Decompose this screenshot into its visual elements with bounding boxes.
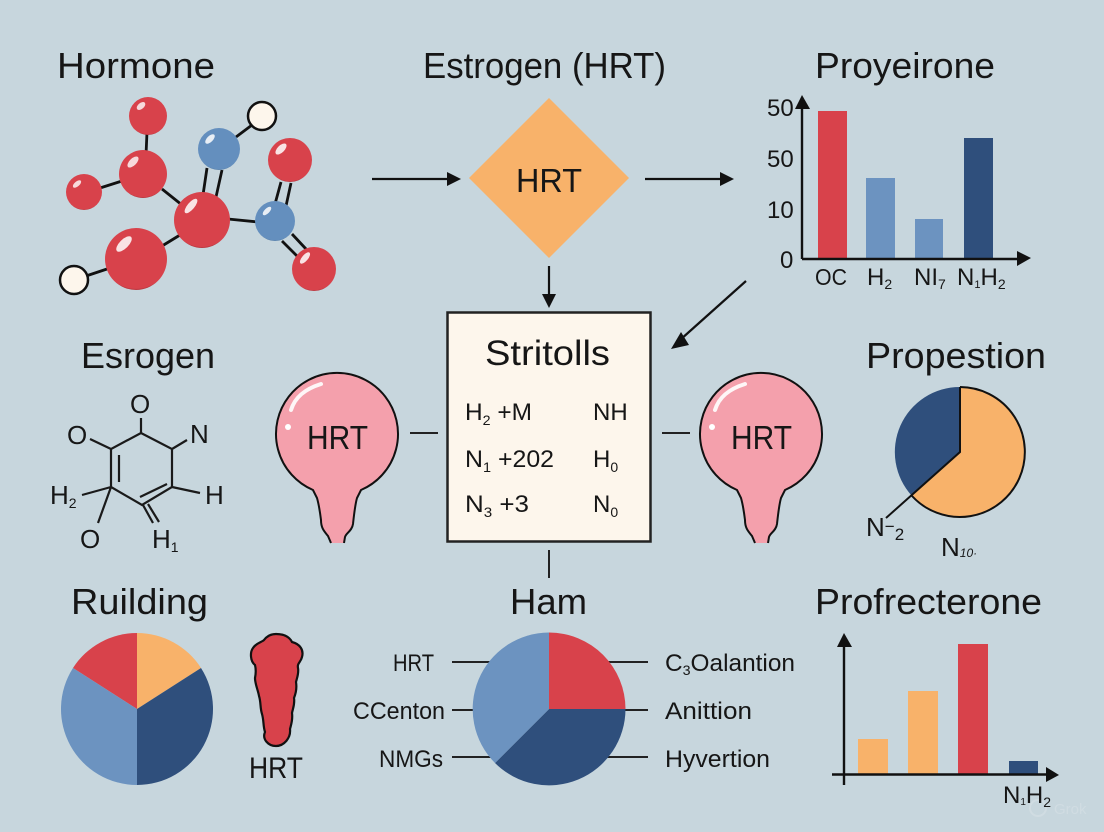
x axis labels: N [957, 264, 974, 291]
connector: left bulb to box [410, 432, 438, 434]
structure: skeletal formula [50, 389, 224, 555]
y axis labels: 0 [780, 247, 793, 274]
x axis labels: 7 [938, 276, 946, 292]
panel: Stritolls box: H [593, 446, 610, 473]
connector: below box [548, 550, 550, 578]
panel: Stritolls box: +3 [492, 491, 529, 518]
bars [858, 644, 1038, 774]
heading: Proyeirone: Proyeirone [815, 45, 995, 86]
structure: skeletal formula: O [80, 524, 100, 554]
panel: Stritolls box: NH [593, 399, 628, 426]
x axis label: 1 [1020, 797, 1026, 808]
icon: red organ with HRT label [249, 634, 303, 785]
panel: Stritolls box: 1 [483, 459, 491, 475]
heading: Profrecterone: Profrecterone [815, 581, 1042, 622]
callouts: Ham right labels: 3 [683, 662, 691, 678]
panel: Stritolls box: 3 [484, 504, 492, 520]
heading: Propestion: Propestion [866, 335, 1046, 376]
icon: red organ with HRT label: HRT [249, 752, 303, 785]
pie chart: Propestion: 2 [895, 525, 904, 544]
heading: Ruilding: Ruilding [71, 581, 208, 622]
axes [795, 95, 1031, 266]
bar chart: Proyeirone [767, 95, 1031, 292]
heading: Esrogen: Esrogen [81, 335, 215, 376]
structure: skeletal formula: H [152, 524, 171, 554]
x axis labels: 2 [884, 276, 892, 292]
panel: Stritolls box: N [593, 491, 610, 518]
panel: Stritolls box [448, 312, 650, 542]
x axis labels [815, 264, 1006, 292]
x axis label: N [1003, 782, 1020, 809]
x axis labels: OC [815, 264, 847, 290]
structure: skeletal formula: O [67, 420, 87, 450]
callouts: Ham right labels: Oalantion [691, 650, 795, 677]
icon: left HRT bulb [276, 373, 398, 543]
icon: ball and stick molecule [60, 97, 336, 294]
diamond: HRT [469, 98, 629, 258]
heading: Ham: Ham [510, 581, 587, 622]
y axis labels [767, 95, 794, 274]
arrow: diamond to box [542, 266, 556, 308]
callouts: Ham left labels: CCenton [353, 698, 445, 725]
panel: Stritolls box: 0 [610, 459, 618, 475]
arrow: chart to box [671, 281, 746, 349]
arrow: molecule to diamond [372, 172, 461, 186]
heading: Estrogen (HRT): Estrogen (HRT) [423, 45, 666, 86]
y axis labels: 50 [767, 95, 794, 122]
x axis labels: H [980, 264, 998, 291]
bars [818, 111, 993, 258]
watermark: Grok [1030, 800, 1087, 818]
pie chart: Ham [473, 632, 626, 785]
panel: Stritolls box: Stritolls [485, 334, 610, 373]
panel: Stritolls box: N [465, 491, 482, 518]
pie chart: Propestion: 10· [960, 546, 977, 560]
icon: left HRT bulb: HRT [307, 419, 368, 456]
callouts: Ham right labels: C [665, 650, 682, 677]
pie chart: Propestion [866, 387, 1025, 562]
structure: skeletal formula: 1 [171, 539, 179, 555]
structure: skeletal formula: N [190, 419, 209, 449]
x axis labels: 1 [974, 279, 980, 291]
panel: Stritolls box: +M [491, 399, 532, 426]
icon: right HRT bulb [700, 373, 822, 543]
panel: Stritolls box: 0 [610, 504, 618, 520]
bar chart: Profrecterone [832, 633, 1059, 810]
icon: right HRT bulb: HRT [731, 419, 792, 456]
callouts: Ham right labels [600, 650, 795, 773]
x axis label: 2 [1043, 794, 1051, 810]
structure: skeletal formula: H [205, 480, 224, 510]
panel: Stritolls box: +202 [491, 446, 554, 473]
panel: Stritolls box: 2 [483, 412, 491, 428]
x axis label: H [1026, 782, 1043, 809]
arrow: diamond to chart [645, 172, 734, 186]
callouts: Ham left labels: NMGs [379, 746, 443, 773]
callouts: Ham left labels [353, 650, 495, 773]
structure: skeletal formula: 2 [69, 495, 77, 511]
x axis labels: NI [914, 264, 938, 291]
diamond: HRT: HRT [516, 162, 582, 199]
watermark: Grok: Grok [1054, 801, 1087, 818]
pie chart: Propestion: − [885, 517, 895, 536]
panel: Stritolls box: H [465, 399, 482, 426]
x axis labels: H [867, 264, 884, 291]
callouts: Ham right labels: Anittion [665, 698, 752, 725]
y axis labels: 10 [767, 197, 794, 224]
x axis labels: 2 [998, 276, 1006, 292]
heading: Hormone: Hormone [57, 45, 215, 86]
axes [832, 633, 1059, 785]
y axis labels: 50 [767, 146, 794, 173]
structure: skeletal formula: O [130, 389, 150, 419]
structure: skeletal formula: H [50, 480, 69, 510]
callouts: Ham left labels: HRT [393, 650, 434, 677]
pie chart: Propestion: N [866, 512, 885, 542]
panel: Stritolls box: N [465, 446, 482, 473]
connector: box to right bulb [662, 432, 690, 434]
pie chart: Propestion: N [941, 532, 960, 562]
pie chart: Ruilding [61, 633, 213, 785]
callouts: Ham right labels: Hyvertion [665, 746, 770, 773]
